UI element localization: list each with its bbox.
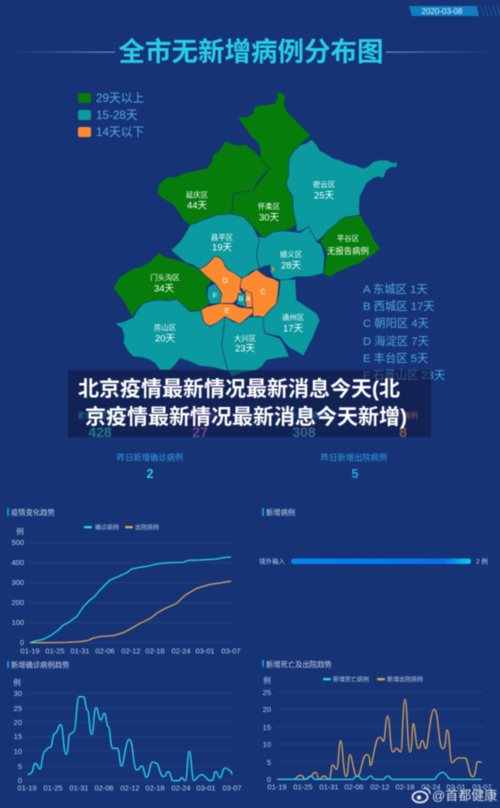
map of Beijing districts: A bbox=[246, 294, 251, 303]
chart: new deaths and discharges trend: 5 bbox=[267, 758, 271, 767]
chart: epidemic trend: 01-31 bbox=[70, 646, 90, 656]
district key list: D 海淀区 7天 bbox=[363, 334, 429, 348]
map of Beijing districts: 平谷区 bbox=[337, 234, 360, 243]
chart: new cases bar: 2 例 bbox=[476, 556, 488, 566]
chart: new deaths and discharges trend: 01-19 bbox=[267, 782, 287, 792]
chart: epidemic trend bbox=[7, 508, 241, 656]
chart: new deaths and discharges trend: 02-06 bbox=[344, 782, 364, 792]
chart: new deaths and discharges trend: 01-25 bbox=[293, 782, 313, 792]
map of Beijing districts bbox=[113, 92, 397, 377]
chart: epidemic trend: 200 bbox=[11, 598, 24, 607]
summary statistics: 死亡病例 bbox=[388, 410, 418, 420]
summary statistics: 8 bbox=[399, 424, 407, 440]
chart: new deaths and discharges trend: 15 bbox=[263, 723, 271, 732]
chart: new confirmed trend: 10 bbox=[14, 747, 22, 756]
chart: new deaths and discharges trend: 10 bbox=[263, 740, 271, 749]
district key list: C 朝阳区 4天 bbox=[363, 317, 429, 330]
chart: new cases bar bbox=[259, 508, 488, 566]
chart: new cases bar: 新增病例 bbox=[266, 508, 295, 517]
chart: new confirmed trend: 02-12 bbox=[120, 784, 140, 792]
chart: new confirmed trend: 15 bbox=[14, 732, 22, 741]
chart: new deaths and discharges trend: 新增出院病例 bbox=[387, 676, 423, 684]
summary statistics: 累计出院病例 bbox=[282, 410, 326, 420]
chart: epidemic trend: 02-12 bbox=[121, 646, 141, 656]
chart: new confirmed trend: 20 bbox=[14, 718, 22, 727]
overlay headline banner bbox=[68, 370, 431, 437]
chart: epidemic trend: 疫情变化趋势 bbox=[11, 508, 55, 517]
chart: epidemic trend: 例 bbox=[16, 526, 24, 536]
chart: epidemic trend: 确诊病例 bbox=[95, 524, 119, 532]
map of Beijing districts: 19天 bbox=[212, 242, 233, 254]
chart: new confirmed trend: 新增确诊病例趋势 bbox=[11, 660, 70, 670]
chart: new confirmed trend bbox=[7, 660, 242, 792]
title: 全市无新增病例分布图 bbox=[118, 37, 384, 67]
chart: new confirmed trend: 03-01 bbox=[196, 784, 216, 792]
map of Beijing districts: 顺义区 bbox=[280, 250, 303, 259]
chart: epidemic trend: 02-24 bbox=[171, 646, 191, 656]
chart: new deaths and discharges trend: 0 bbox=[267, 775, 271, 784]
map of Beijing districts: 17天 bbox=[283, 324, 304, 334]
chart: new deaths and discharges trend: 01-31 bbox=[319, 782, 339, 792]
chart: epidemic trend: 02-06 bbox=[95, 646, 115, 656]
overlay headline banner: 京疫情最新情况最新消息今天新增) bbox=[85, 405, 407, 429]
chart: epidemic trend: 03-07 bbox=[221, 646, 241, 656]
chart: epidemic trend: 500 bbox=[11, 538, 24, 547]
chart: new confirmed trend: 5 bbox=[18, 762, 22, 771]
map of Beijing districts: 昌平区 bbox=[211, 233, 234, 242]
district key list: E 丰台区 5天 bbox=[363, 351, 428, 365]
map of Beijing districts: 延庆区 bbox=[186, 190, 209, 200]
chart: new deaths and discharges trend: 新增死亡及出院趋势 bbox=[266, 660, 332, 669]
chart: new confirmed trend: 0 bbox=[18, 776, 22, 785]
map of Beijing districts: C bbox=[260, 287, 266, 296]
map of Beijing districts: 大兴区 bbox=[234, 334, 257, 343]
chart: new confirmed trend: 01-25 bbox=[43, 784, 63, 792]
summary statistics: 5 bbox=[352, 467, 359, 481]
overlay headline banner: 北京疫情最新情况最新消息今天(北 bbox=[78, 377, 400, 401]
date badge bbox=[409, 6, 500, 16]
map of Beijing districts: 20天 bbox=[155, 334, 176, 344]
chart: epidemic trend: 100 bbox=[11, 618, 24, 627]
district key list: B 西城区 17天 bbox=[363, 300, 435, 313]
map of Beijing districts: D bbox=[222, 276, 228, 285]
chart: new confirmed trend: 01-31 bbox=[69, 784, 89, 792]
chart: epidemic trend: 300 bbox=[11, 578, 24, 587]
map of Beijing districts: 34天 bbox=[154, 284, 175, 294]
map of Beijing districts: 23天 bbox=[235, 344, 256, 354]
chart: new confirmed trend: 01-19 bbox=[17, 784, 37, 792]
chart: new cases bar: 境外输入 bbox=[259, 556, 286, 566]
chart: new confirmed trend: 02-06 bbox=[94, 784, 114, 792]
map of Beijing districts: 无报告病例 bbox=[327, 246, 369, 256]
map of Beijing districts: 28天 bbox=[281, 260, 302, 272]
chart: epidemic trend: 出院病例 bbox=[135, 524, 159, 532]
map legend: 29天以上 bbox=[96, 92, 144, 105]
chart: new confirmed trend: 25 bbox=[14, 704, 22, 713]
map of Beijing districts: F bbox=[213, 291, 218, 300]
chart: epidemic trend: 03-01 bbox=[195, 646, 215, 656]
map of Beijing districts: E bbox=[225, 306, 230, 315]
chart: new deaths and discharges trend: 25 bbox=[263, 688, 271, 697]
summary statistics: 昨日新增出院病例 bbox=[321, 452, 387, 462]
map of Beijing districts: 通州区 bbox=[282, 313, 305, 322]
chart: epidemic trend: 0 bbox=[20, 638, 24, 647]
chart: new deaths and discharges trend: 20 bbox=[263, 705, 271, 714]
date badge: 2020-03-08 bbox=[422, 7, 463, 16]
summary statistics bbox=[78, 410, 418, 481]
chart: epidemic trend: 02-18 bbox=[145, 646, 165, 656]
district key list: F 石景山区 23天 bbox=[363, 369, 445, 382]
map of Beijing districts: 房山区 bbox=[154, 323, 177, 332]
map legend: 15-28天 bbox=[96, 109, 138, 122]
chart: new deaths and discharges trend: 03-01 bbox=[446, 782, 466, 792]
map of Beijing districts: 密云区 bbox=[313, 180, 336, 189]
summary statistics: 疑似病例 bbox=[185, 410, 215, 420]
chart: new deaths and discharges trend: 新增死亡病例 bbox=[333, 676, 369, 684]
chart: new deaths and discharges trend: 02-12 bbox=[370, 782, 390, 792]
map of Beijing districts: 44天 bbox=[187, 200, 208, 212]
chart: new confirmed trend: 例 bbox=[13, 677, 21, 687]
chart: epidemic trend: 01-25 bbox=[45, 646, 65, 656]
summary statistics: 308 bbox=[292, 424, 316, 440]
watermark: @首都健康 bbox=[432, 788, 497, 803]
summary statistics: 2 bbox=[147, 467, 154, 481]
chart: new confirmed trend: 03-07 bbox=[222, 784, 242, 792]
summary statistics: 昨日新增确诊病例 bbox=[117, 452, 183, 462]
map legend bbox=[78, 92, 144, 139]
chart: new deaths and discharges trend: 02-18 bbox=[395, 782, 415, 792]
map of Beijing districts: 门头沟区 bbox=[150, 273, 180, 282]
map of Beijing districts: 30天 bbox=[259, 212, 280, 224]
chart: new deaths and discharges trend: 例 bbox=[263, 675, 271, 685]
district key list bbox=[363, 283, 445, 382]
chart: new confirmed trend: 02-18 bbox=[145, 784, 165, 792]
chart: new confirmed trend: 30 bbox=[14, 689, 22, 698]
summary statistics: 累计确诊病例 bbox=[78, 410, 122, 420]
chart: epidemic trend: 01-19 bbox=[20, 646, 40, 656]
district key list: A 东城区 1天 bbox=[363, 283, 428, 296]
chart: new deaths and discharges trend: 03-07 bbox=[472, 782, 492, 792]
chart: new deaths and discharges trend bbox=[262, 660, 492, 792]
chart: new confirmed trend: 02-24 bbox=[171, 784, 191, 792]
map of Beijing districts: 怀柔区 bbox=[258, 202, 281, 211]
summary statistics: 27 bbox=[192, 424, 208, 440]
chart: epidemic trend: 400 bbox=[11, 558, 24, 567]
map of Beijing districts: 25天 bbox=[314, 190, 335, 202]
chart: new deaths and discharges trend: 02-24 bbox=[421, 782, 441, 792]
map of Beijing districts: B bbox=[239, 294, 244, 303]
summary statistics: 428 bbox=[88, 424, 112, 440]
map legend: 14天以下 bbox=[96, 126, 144, 139]
